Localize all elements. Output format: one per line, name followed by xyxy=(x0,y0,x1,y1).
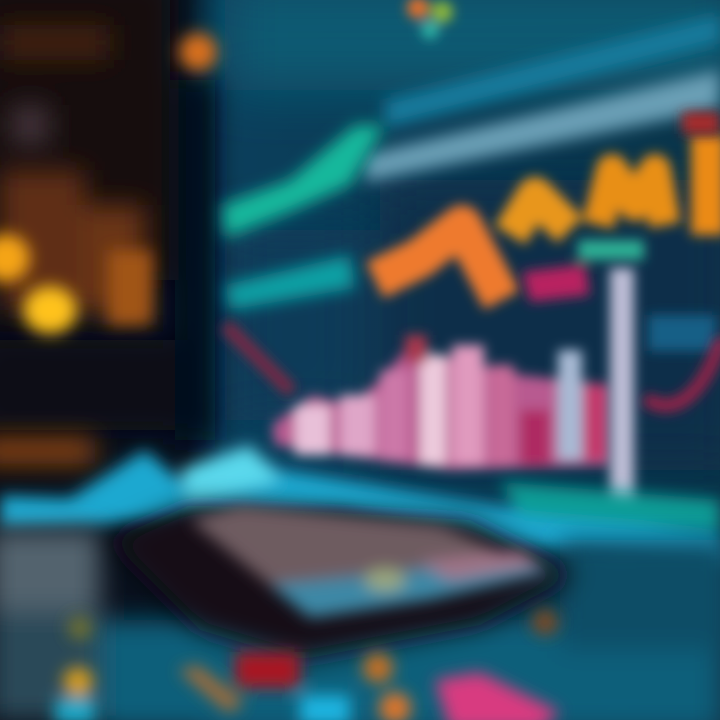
device: tablet on desk xyxy=(110,505,575,660)
chart line: cyan wave xyxy=(0,445,720,565)
panel: dark left building xyxy=(0,0,215,440)
glow: yellow lights xyxy=(0,33,217,334)
marker: vertical pale bar xyxy=(606,268,634,700)
tablet body shadow xyxy=(110,505,575,660)
tablet screen xyxy=(190,505,550,618)
chart line: magenta and green accents xyxy=(522,112,720,351)
chart line: rainbow spot at top xyxy=(407,0,453,39)
panel: upper teal wash xyxy=(225,0,720,470)
glow: orange windows on left xyxy=(0,25,145,464)
band: light blue diagonal bars xyxy=(365,15,720,182)
chart line: orange zigzag peaks xyxy=(375,135,708,300)
chart line: red curve right and left xyxy=(225,325,720,406)
chart line: pink and white striped peaks xyxy=(272,335,610,470)
bottom colored accents xyxy=(55,609,560,720)
bottom surface xyxy=(0,530,720,720)
chart line: green rising band xyxy=(222,125,385,310)
